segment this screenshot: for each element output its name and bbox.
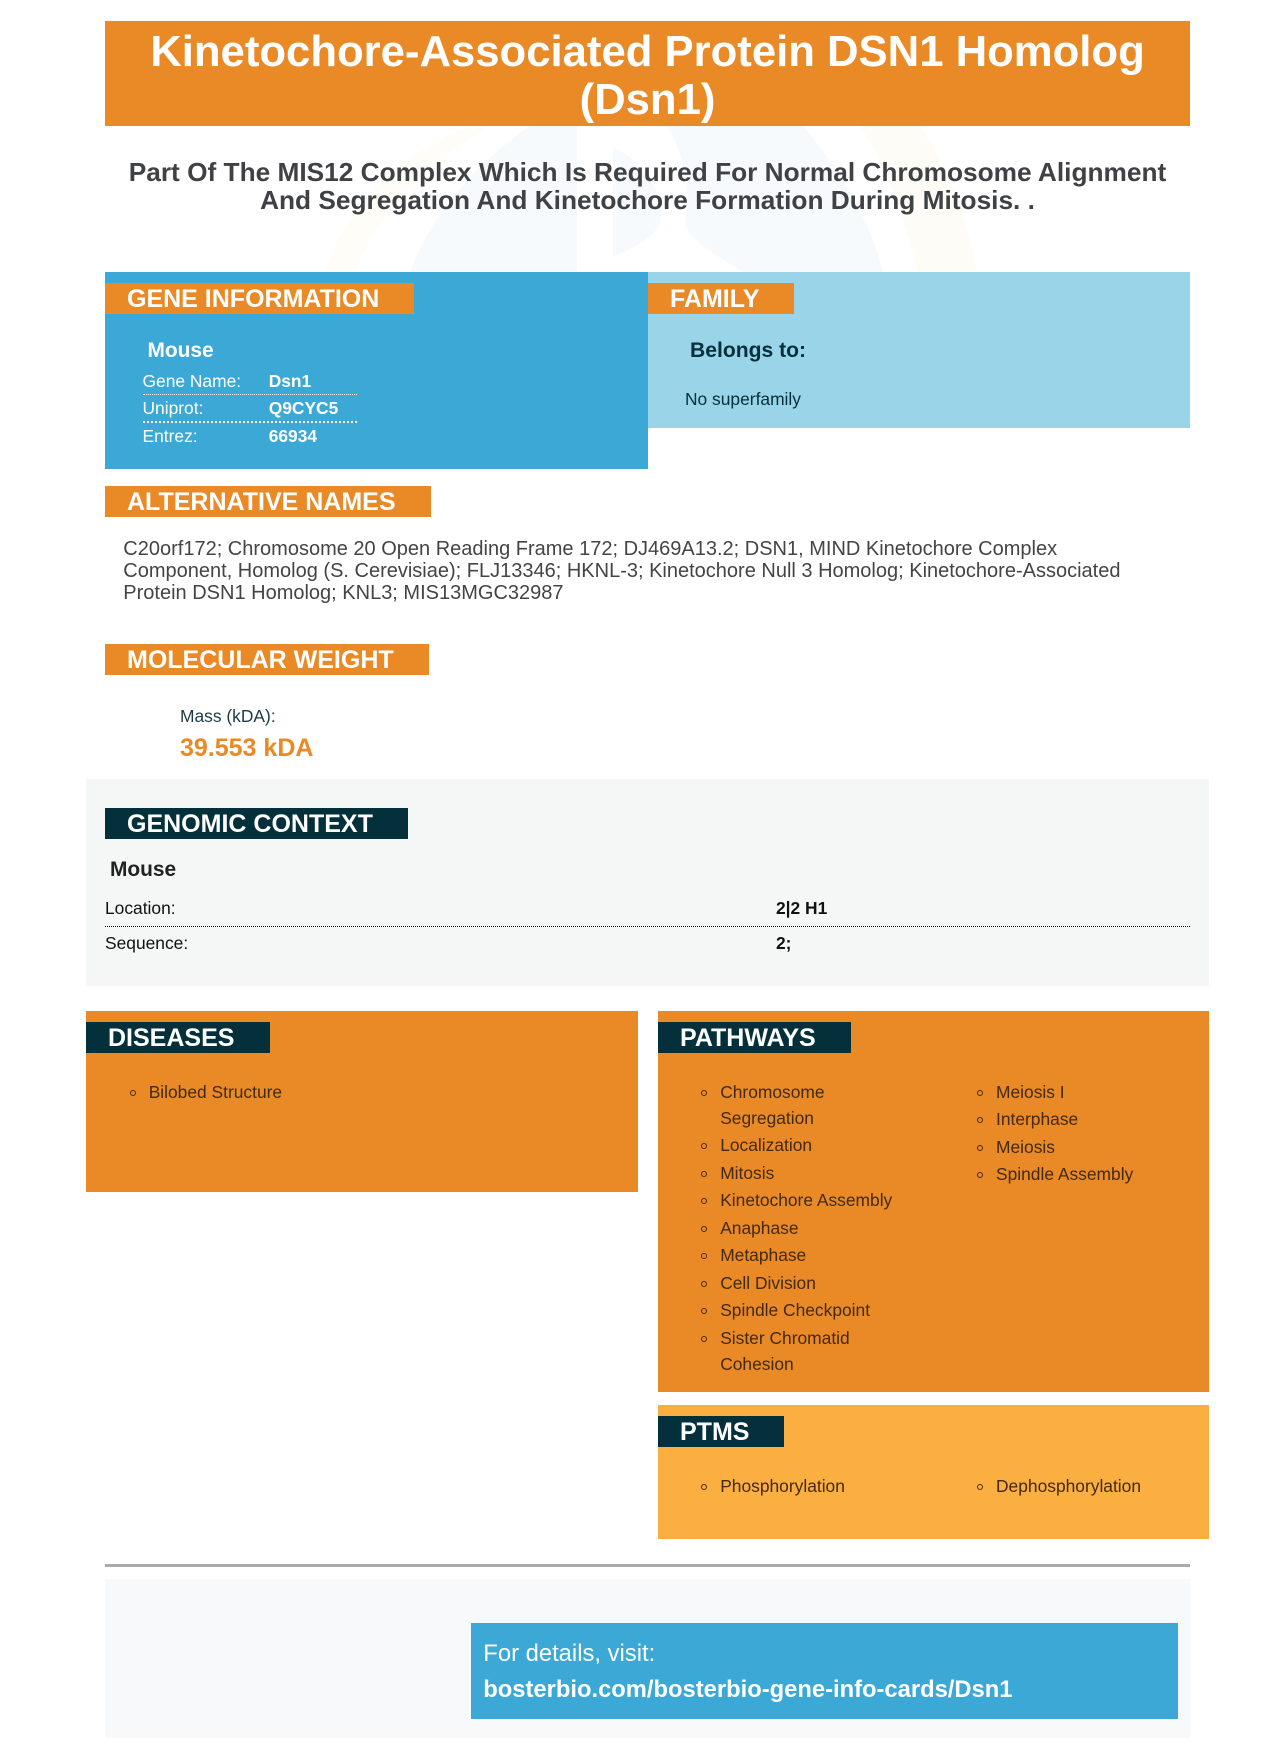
subtitle	[129, 157, 1166, 215]
alternative names text: Protein DSN1 Homolog; KNL3; MIS13MGC32987	[123, 582, 564, 604]
species label: Mouse	[110, 858, 176, 881]
pathways list column two: Meiosis I	[996, 1082, 1065, 1102]
uniprot row	[142, 398, 338, 418]
pathways list column one	[701, 1082, 892, 1374]
heading: ptms	[658, 1416, 784, 1447]
alternative names text: C20orf172; Chromosome 20 Open Reading Frame 172; DJ469A13.2; DSN1, MIND Kinetochore Complex	[123, 538, 1057, 560]
details url: bosterbio.com/bosterbio-gene-info-cards/Dsn1	[483, 1676, 1012, 1703]
heading: ptms: PTMS	[680, 1418, 749, 1446]
panel: gene information	[105, 272, 648, 469]
ptm item: Phosphorylation	[720, 1476, 845, 1496]
pathways list column one: Sister Chromatid	[720, 1328, 850, 1348]
gene name row: Gene Name:	[142, 371, 241, 391]
pathways list column one: Chromosome	[720, 1082, 825, 1102]
pathways list column one: Anaphase	[720, 1218, 799, 1238]
heading: pathways: PATHWAYS	[680, 1024, 816, 1052]
pathways list column one: Localization	[720, 1134, 812, 1154]
sequence row	[105, 933, 791, 953]
location row: 2|2 H1	[776, 898, 827, 918]
heading: molecular weight: MOLECULAR WEIGHT	[127, 646, 394, 674]
pathways list column two: Spindle Assembly	[996, 1164, 1133, 1184]
heading: alternative names: ALTERNATIVE NAMES	[127, 488, 396, 516]
pathways list column one: Cell Division	[720, 1272, 816, 1292]
pathways list column one: Segregation	[720, 1108, 814, 1128]
pathways list column one: Kinetochore Assembly	[720, 1190, 892, 1210]
mass label: Mass (kDA):	[180, 706, 276, 726]
panel: diseases	[86, 1011, 638, 1192]
heading: genomic context: GENOMIC CONTEXT	[127, 810, 373, 838]
ptm item: Dephosphorylation	[996, 1476, 1141, 1496]
uniprot row: Q9CYC5	[269, 398, 338, 418]
pathways list column two: Interphase	[996, 1109, 1078, 1129]
panel: footer	[105, 1579, 1190, 1738]
gene name row: Dsn1	[269, 371, 311, 391]
title banner	[105, 21, 1190, 126]
callout: details link	[471, 1623, 1178, 1719]
mass value: 39.553 kDA	[180, 734, 313, 762]
subtitle: And Segregation And Kinetochore Formation During Mitosis. .	[260, 185, 1035, 215]
pathways list column one: Spindle Checkpoint	[720, 1300, 870, 1320]
disease item: Bilobed Structure	[149, 1082, 282, 1102]
heading: diseases	[86, 1022, 270, 1053]
pathways list column one: Mitosis	[720, 1162, 774, 1182]
entrez row: 66934	[269, 426, 317, 446]
heading: family: FAMILY	[670, 285, 759, 313]
panel: ptms	[658, 1405, 1209, 1539]
sequence row: Sequence:	[105, 933, 188, 953]
location row	[105, 898, 827, 918]
panel: genomic context	[86, 779, 1209, 986]
belongs to label: Belongs to:	[690, 339, 806, 362]
details label: For details, visit:	[483, 1640, 655, 1667]
heading: family	[648, 283, 794, 314]
species label: Mouse	[148, 339, 214, 362]
pathways list column two: Meiosis	[996, 1136, 1055, 1156]
pathways list column one: Metaphase	[720, 1244, 806, 1264]
superfamily text: No superfamily	[685, 389, 801, 409]
uniprot row: Uniprot:	[142, 398, 203, 418]
alternative names text: Component, Homolog (S. Cerevisiae); FLJ13346; HKNL-3; Kinetochore Null 3 Homolog; Kinetochore-Associated	[123, 560, 1120, 582]
sequence row: 2;	[776, 933, 791, 953]
subtitle: Part Of The MIS12 Complex Which Is Required For Normal Chromosome Alignment	[129, 157, 1166, 187]
location row: Location:	[105, 898, 176, 918]
panel: pathways	[658, 1011, 1209, 1392]
pathways list column two	[977, 1082, 1134, 1184]
pathways list column one: Cohesion	[720, 1354, 794, 1374]
panel: family	[648, 272, 1190, 428]
gene name row	[142, 371, 311, 391]
entrez row	[142, 426, 317, 446]
title banner: Kinetochore-Associated Protein DSN1 Homolog	[150, 27, 1145, 76]
alternative names text	[123, 538, 1120, 604]
background watermark logo	[410, 126, 882, 272]
heading: gene information: GENE INFORMATION	[127, 285, 379, 313]
heading: diseases: DISEASES	[108, 1024, 234, 1052]
title banner: (Dsn1)	[580, 75, 715, 124]
heading: pathways	[658, 1022, 851, 1053]
entrez row: Entrez:	[142, 426, 198, 446]
